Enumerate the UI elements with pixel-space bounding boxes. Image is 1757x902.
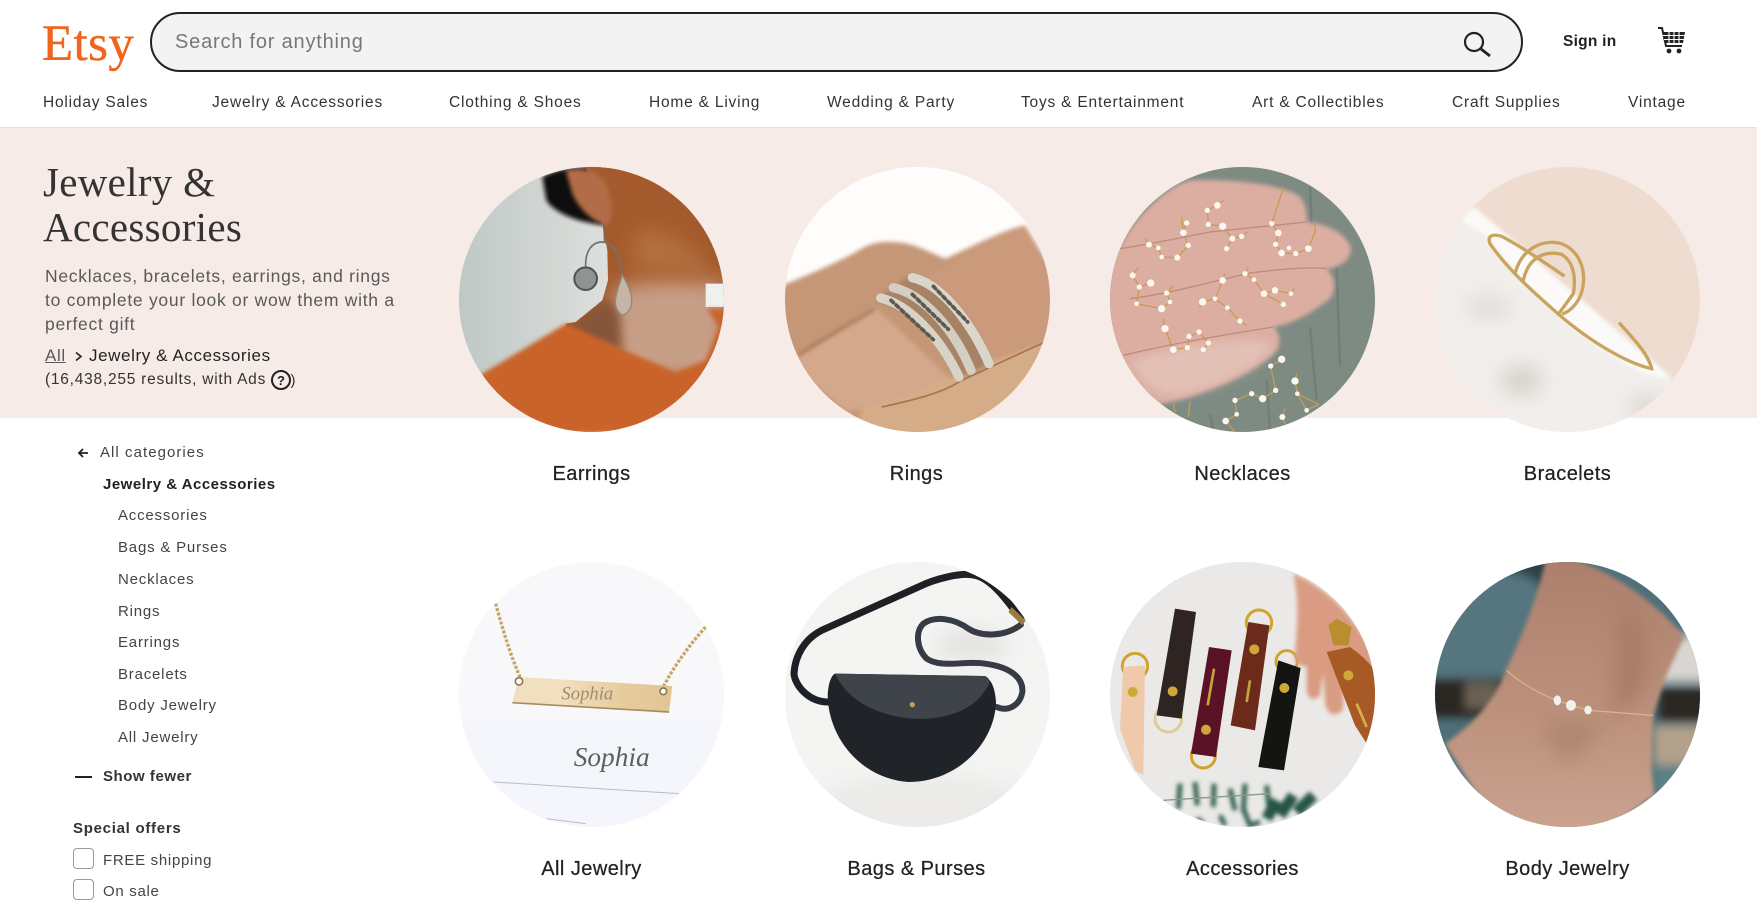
show fewer label: Show fewer (103, 768, 192, 785)
sidebar item: All Jewelry (118, 729, 198, 746)
navigation bar (0, 0, 1757, 127)
heading: Jewelry & (43, 159, 215, 205)
sidebar item: Body Jewelry (118, 697, 217, 714)
nav item: Holiday Sales (43, 94, 148, 111)
label: earrings: Earrings (552, 463, 631, 485)
label: all jewelry: All Jewelry (541, 858, 642, 880)
panel: hero banner (0, 128, 1757, 418)
breadcrumb (45, 346, 271, 365)
label: bracelets: Bracelets (1524, 463, 1611, 485)
sidebar item: Necklaces (118, 571, 194, 588)
nav item: Vintage (1628, 94, 1686, 111)
special offers heading: Special offers (73, 820, 181, 837)
nav item: Craft Supplies (1452, 94, 1561, 111)
description: perfect gift (45, 314, 135, 334)
label: accessories: Accessories (1186, 858, 1299, 880)
sidebar item: Rings (118, 603, 160, 620)
label: necklaces: Necklaces (1194, 463, 1291, 485)
image: all jewelry (459, 562, 724, 827)
sidebar: current category: Jewelry & Accessories (103, 476, 276, 493)
checkbox: on sale (73, 879, 94, 900)
icon: help (271, 370, 296, 390)
label: rings: Rings (890, 463, 943, 485)
search bar (150, 12, 1523, 72)
nav item: Wedding & Party (827, 94, 955, 111)
all categories: All categories (100, 444, 205, 461)
image: necklaces (1110, 167, 1375, 432)
logo: Etsy (42, 16, 134, 72)
icon: back arrow (78, 448, 88, 458)
image: body jewelry (1435, 562, 1700, 827)
sidebar item: Bags & Purses (118, 539, 228, 556)
icon: cart (1658, 27, 1685, 54)
breadcrumb root: All (45, 346, 66, 365)
sidebar item: Bracelets (118, 666, 188, 683)
nav item: Clothing & Shoes (449, 94, 582, 111)
results count: (16,438,255 results, with Ads (45, 371, 266, 388)
description (45, 266, 395, 334)
icon: help: ? (277, 373, 285, 388)
image: all jewelry: Sophia (561, 683, 613, 704)
on sale label: On sale (103, 883, 160, 900)
icon: minus (75, 776, 92, 778)
breadcrumb current: Jewelry & Accessories (89, 346, 271, 365)
nav item: Toys & Entertainment (1021, 94, 1184, 111)
sidebar item: Accessories (118, 507, 208, 524)
description: to complete your look or wow them with a (45, 290, 395, 310)
image: bags and purses (785, 562, 1050, 827)
label: body jewelry: Body Jewelry (1505, 858, 1630, 880)
sidebar item: Earrings (118, 634, 180, 651)
image: earrings (459, 167, 724, 432)
nav item: Home & Living (649, 94, 760, 111)
heading: Accessories (43, 204, 242, 250)
icon: help: ) (290, 372, 296, 389)
description: Necklaces, bracelets, earrings, and rings (45, 266, 391, 286)
free shipping label: FREE shipping (103, 852, 212, 869)
icon: search (1464, 32, 1491, 58)
label: bags and purses: Bags & Purses (847, 858, 986, 880)
search placeholder: Search for anything (175, 31, 364, 53)
image: bracelets (1435, 167, 1700, 432)
nav item: Art & Collectibles (1252, 94, 1384, 111)
image: accessories (1110, 562, 1375, 827)
nav item: Jewelry & Accessories (212, 94, 383, 111)
heading (43, 159, 242, 250)
sign in: Sign in (1563, 33, 1616, 50)
breadcrumb chevron (76, 352, 82, 361)
image: all jewelry: Sophia (574, 742, 650, 772)
sidebar: back link (78, 444, 205, 461)
image: rings (785, 167, 1050, 432)
checkbox: free shipping (73, 848, 94, 869)
